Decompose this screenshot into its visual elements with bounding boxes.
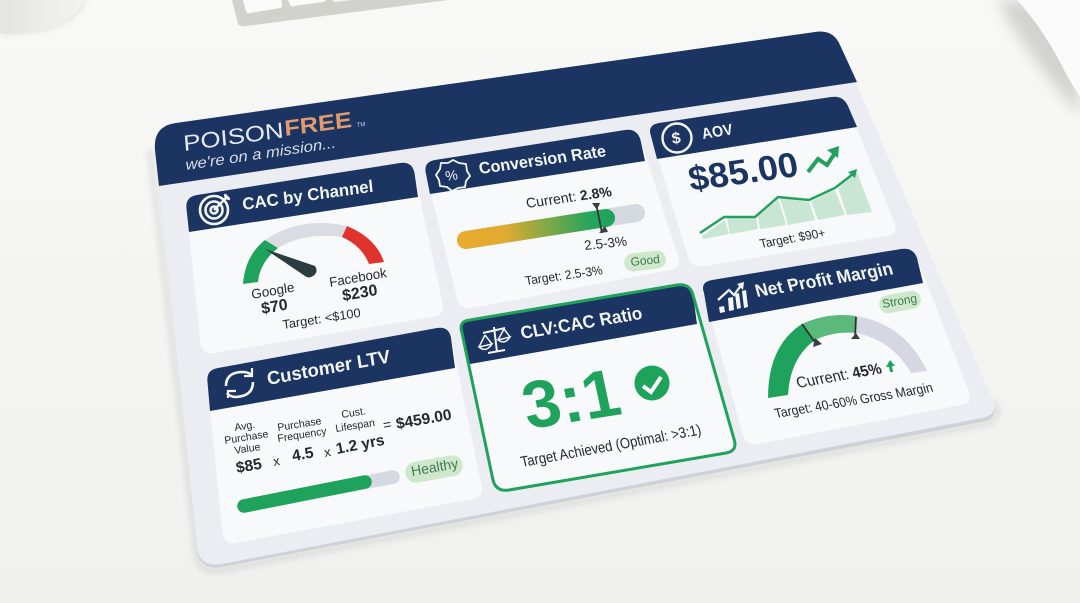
- target text: Target Achieved (Optimal: >3:1): [519, 422, 703, 471]
- marker arrows: [592, 203, 608, 233]
- range label: 2.5-3%: [583, 234, 628, 253]
- panel: AOV: [650, 97, 895, 266]
- panel: CAC by Channel: [186, 163, 443, 353]
- formula values: x: [323, 444, 332, 460]
- badge: Healthy: [404, 454, 464, 484]
- icon: target: [200, 194, 230, 224]
- formula labels: Frequency: [277, 425, 328, 445]
- board header band: [155, 32, 857, 186]
- icon: balance scale: [479, 327, 510, 353]
- ratio value: 3:1: [516, 355, 627, 444]
- computer mouse at top right: [998, 0, 1080, 115]
- heading: AOV: [700, 121, 735, 143]
- heading: CAC by Channel: [241, 177, 374, 214]
- heading: Customer LTV: [265, 345, 392, 389]
- mat shadow: [150, 150, 997, 571]
- icon: dollar: [662, 124, 692, 152]
- progress bar: [466, 203, 636, 240]
- Google value: $70: [260, 296, 289, 318]
- tagline: we're on a mission...: [185, 135, 337, 174]
- formula labels: Lifespan: [335, 417, 376, 435]
- formula values: x: [272, 453, 281, 469]
- Facebook value: Facebook: [328, 265, 388, 290]
- formula values: =: [382, 416, 393, 433]
- icon: check mark: [634, 366, 670, 400]
- icon: percent badge: [436, 160, 470, 191]
- progress bar: [244, 477, 393, 506]
- panel: CLV:CAC Ratio: [461, 285, 735, 490]
- panel: Net Profit Margin: [703, 249, 970, 444]
- formula labels: Purchase: [277, 415, 322, 434]
- target text: Target: $90+: [758, 226, 827, 251]
- Facebook value: $230: [341, 282, 379, 305]
- Google value: Google: [250, 280, 295, 302]
- formula labels: Purchase: [224, 428, 269, 447]
- current value: Current: 45%: [794, 361, 884, 392]
- badge: Good: [623, 250, 667, 272]
- coffee cup at top left: [0, 0, 86, 34]
- icon: refresh: [226, 368, 253, 398]
- badge: Good: Good: [630, 252, 661, 269]
- panel: Conversion Rate: [425, 130, 679, 308]
- icon: dollar: $: [671, 130, 682, 148]
- area line chart: [700, 169, 872, 239]
- formula labels: Cust.: [341, 405, 367, 421]
- current value: Current: 2.8%: [525, 183, 614, 211]
- heading: Conversion Rate: [477, 142, 608, 178]
- gauge: [243, 223, 384, 284]
- formula labels: Avg.: [234, 419, 256, 434]
- icon: percent badge: %: [444, 166, 459, 184]
- gauge marker arrows: [813, 317, 860, 347]
- gauge markers: [802, 324, 817, 345]
- formula values: $459.00: [395, 406, 453, 433]
- Facebook value: [328, 265, 388, 305]
- mat board: [155, 32, 994, 568]
- target text: Target: 2.5-3%: [524, 263, 604, 288]
- Google value: [250, 280, 295, 318]
- logo: PoisonFree: POISON: [182, 117, 284, 156]
- panel: Customer LTV: [207, 328, 482, 543]
- heading: Net Profit Margin: [753, 259, 895, 301]
- formula values: [235, 406, 453, 477]
- formula values: 1.2 yrs: [335, 432, 386, 458]
- heading: CLV:CAC Ratio: [519, 303, 644, 343]
- needle: [265, 249, 317, 278]
- target text: Target: 40-60% Gross Margin: [773, 380, 935, 421]
- formula labels: Value: [234, 441, 261, 457]
- marker: [596, 203, 602, 233]
- big value: $85.00: [685, 145, 801, 199]
- trend arrow: [808, 146, 839, 172]
- target text: Target: <$100: [282, 306, 361, 332]
- formula values: 4.5: [291, 444, 315, 465]
- icon: up arrow: [886, 360, 895, 372]
- badge: Strong: Strong: [881, 291, 918, 311]
- badge: Strong: [878, 289, 922, 315]
- icon: growth chart: [718, 282, 748, 313]
- logo: Free: FREE: [283, 107, 353, 141]
- formula labels: [224, 405, 376, 457]
- badge: Healthy: Healthy: [410, 455, 459, 479]
- trademark: TM: [356, 122, 366, 129]
- formula values: $85: [235, 456, 264, 477]
- gauge: [768, 315, 927, 398]
- keyboard at top: [232, 0, 448, 26]
